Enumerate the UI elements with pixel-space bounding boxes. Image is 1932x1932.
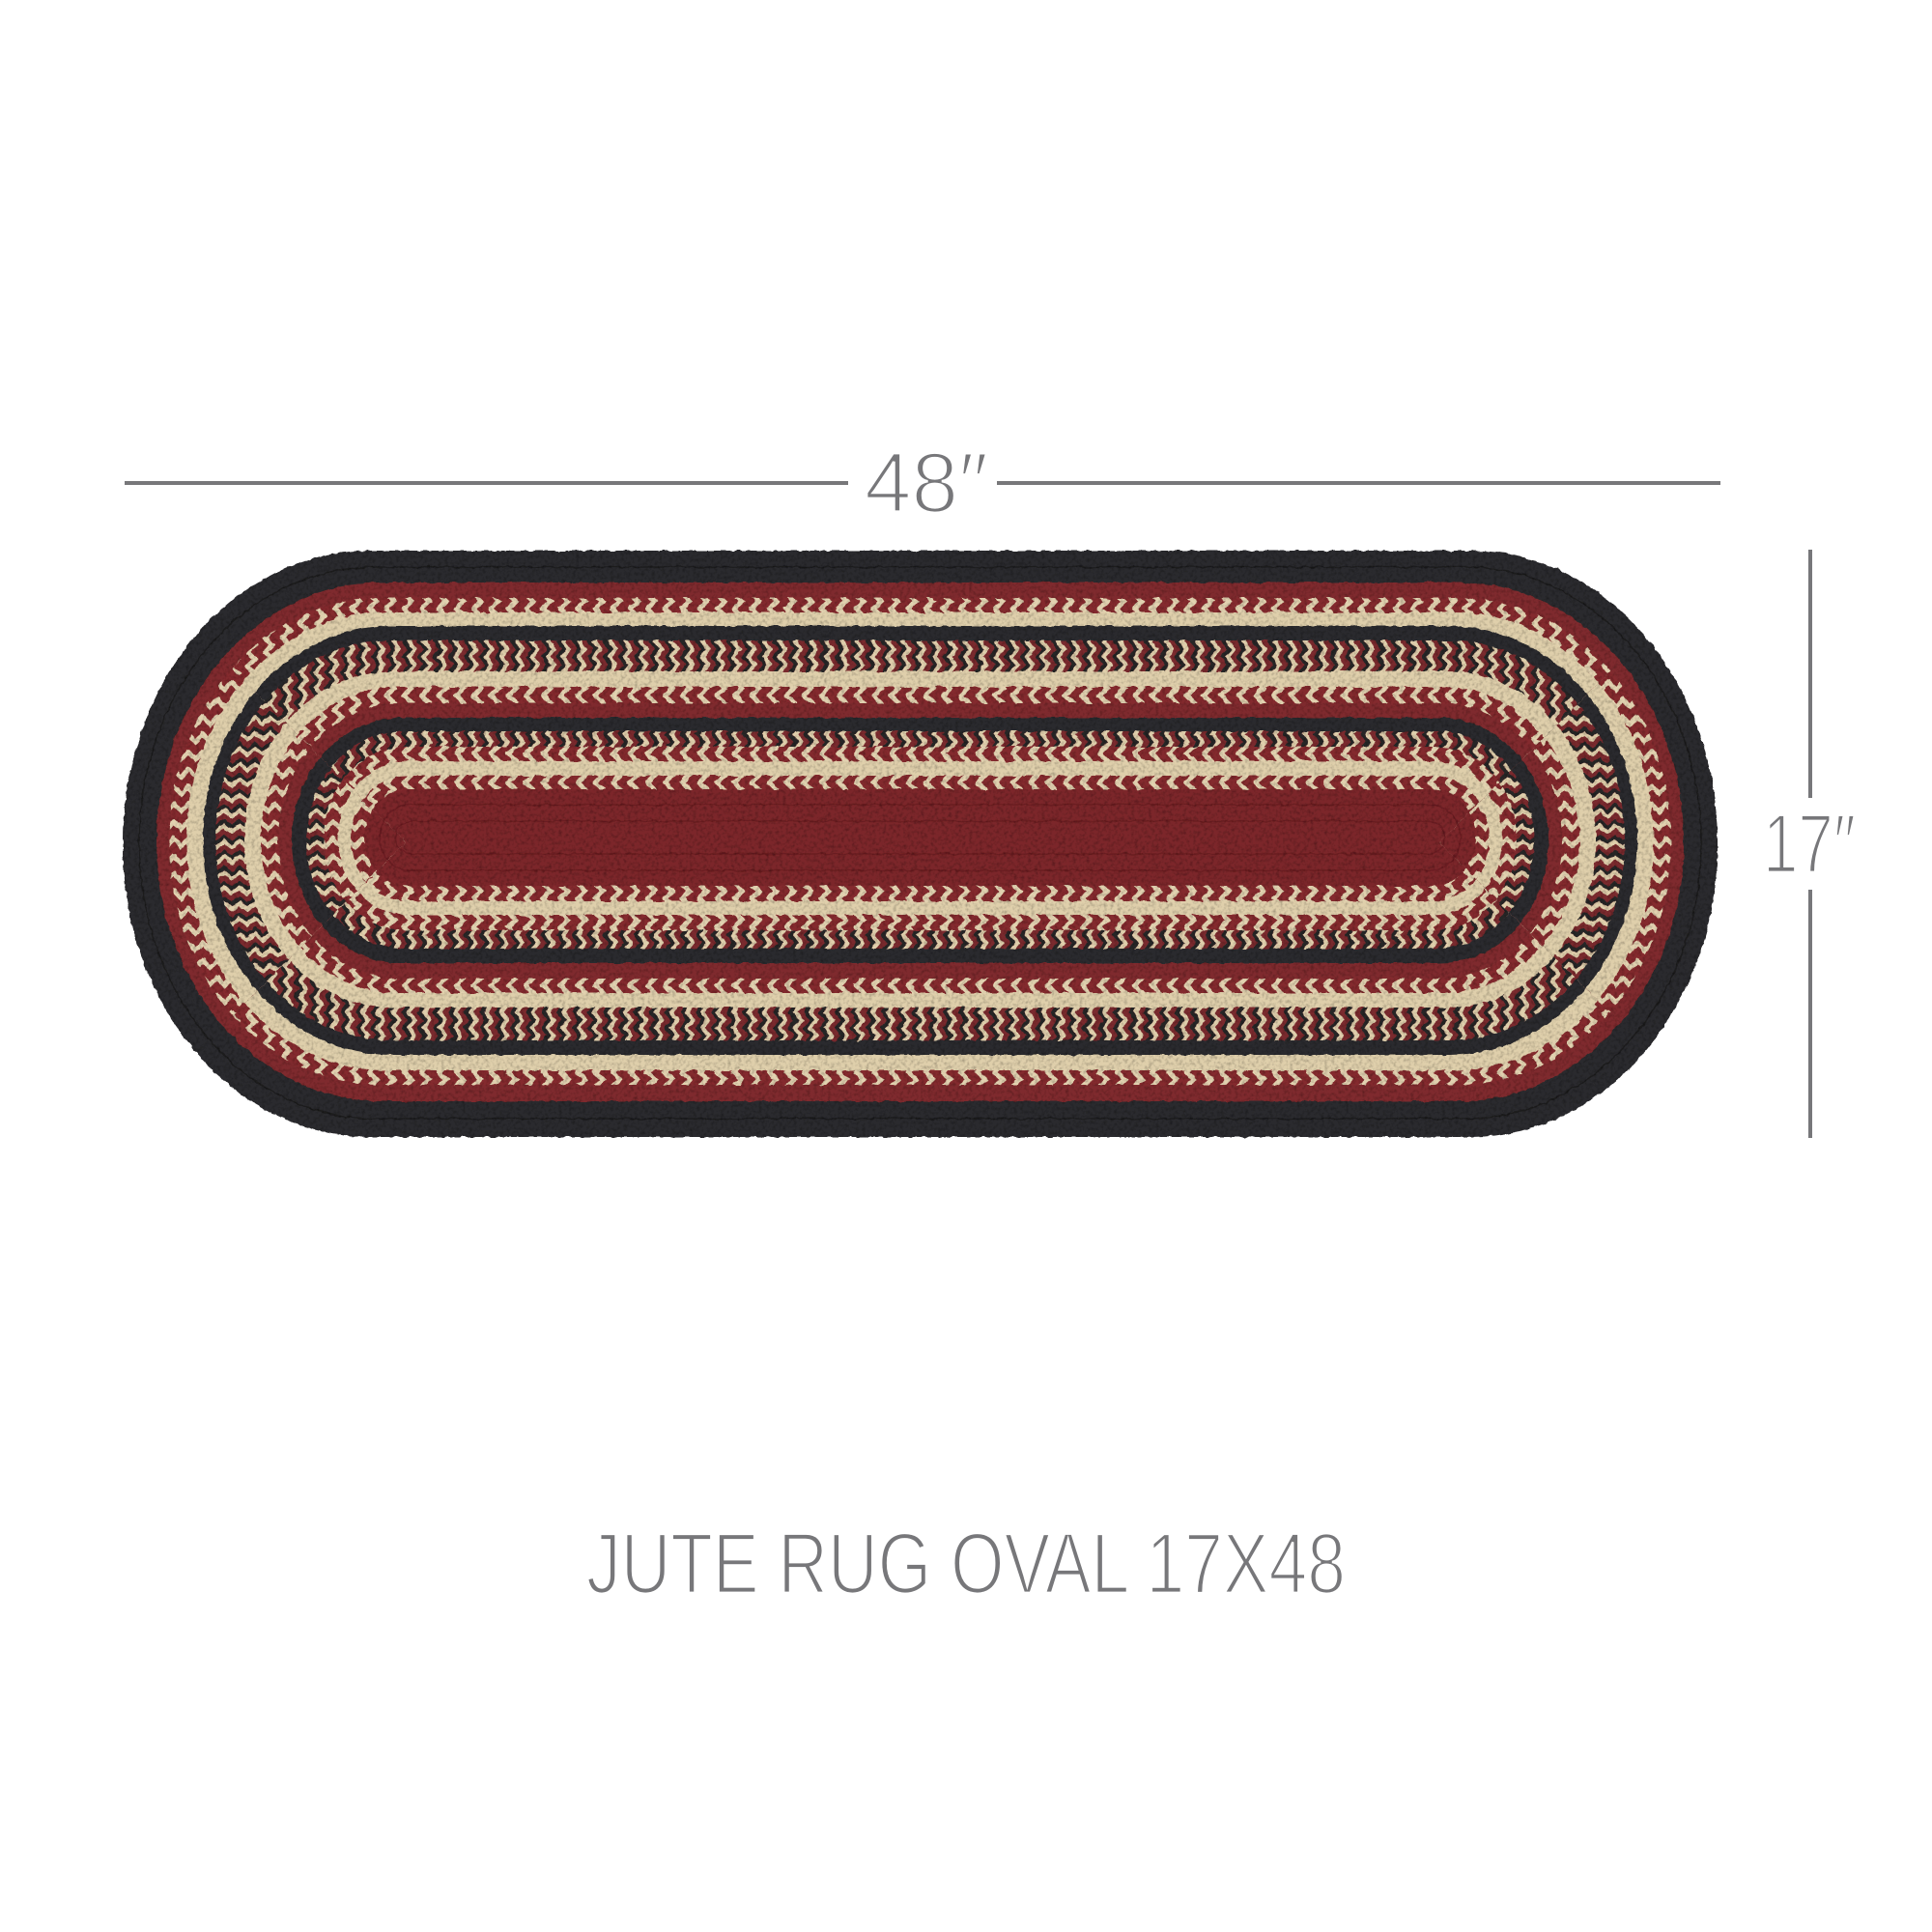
height dimension: 17 inches: 17″ — [1763, 798, 1856, 891]
braided oval rug — [123, 551, 1718, 1137]
width dimension: 48 inches: 48″ — [865, 435, 988, 530]
centre field braid rows — [380, 805, 1461, 870]
rug bands along curved ends — [122, 634, 1718, 1052]
caption: JUTE RUG OVAL 17X48 — [586, 1515, 1346, 1611]
rug bands along straight sides — [123, 551, 1718, 1137]
width dimension: 48 inches — [125, 435, 1720, 530]
outer border braid rows — [139, 567, 1701, 1119]
height dimension: 17 inches — [1763, 550, 1856, 1138]
